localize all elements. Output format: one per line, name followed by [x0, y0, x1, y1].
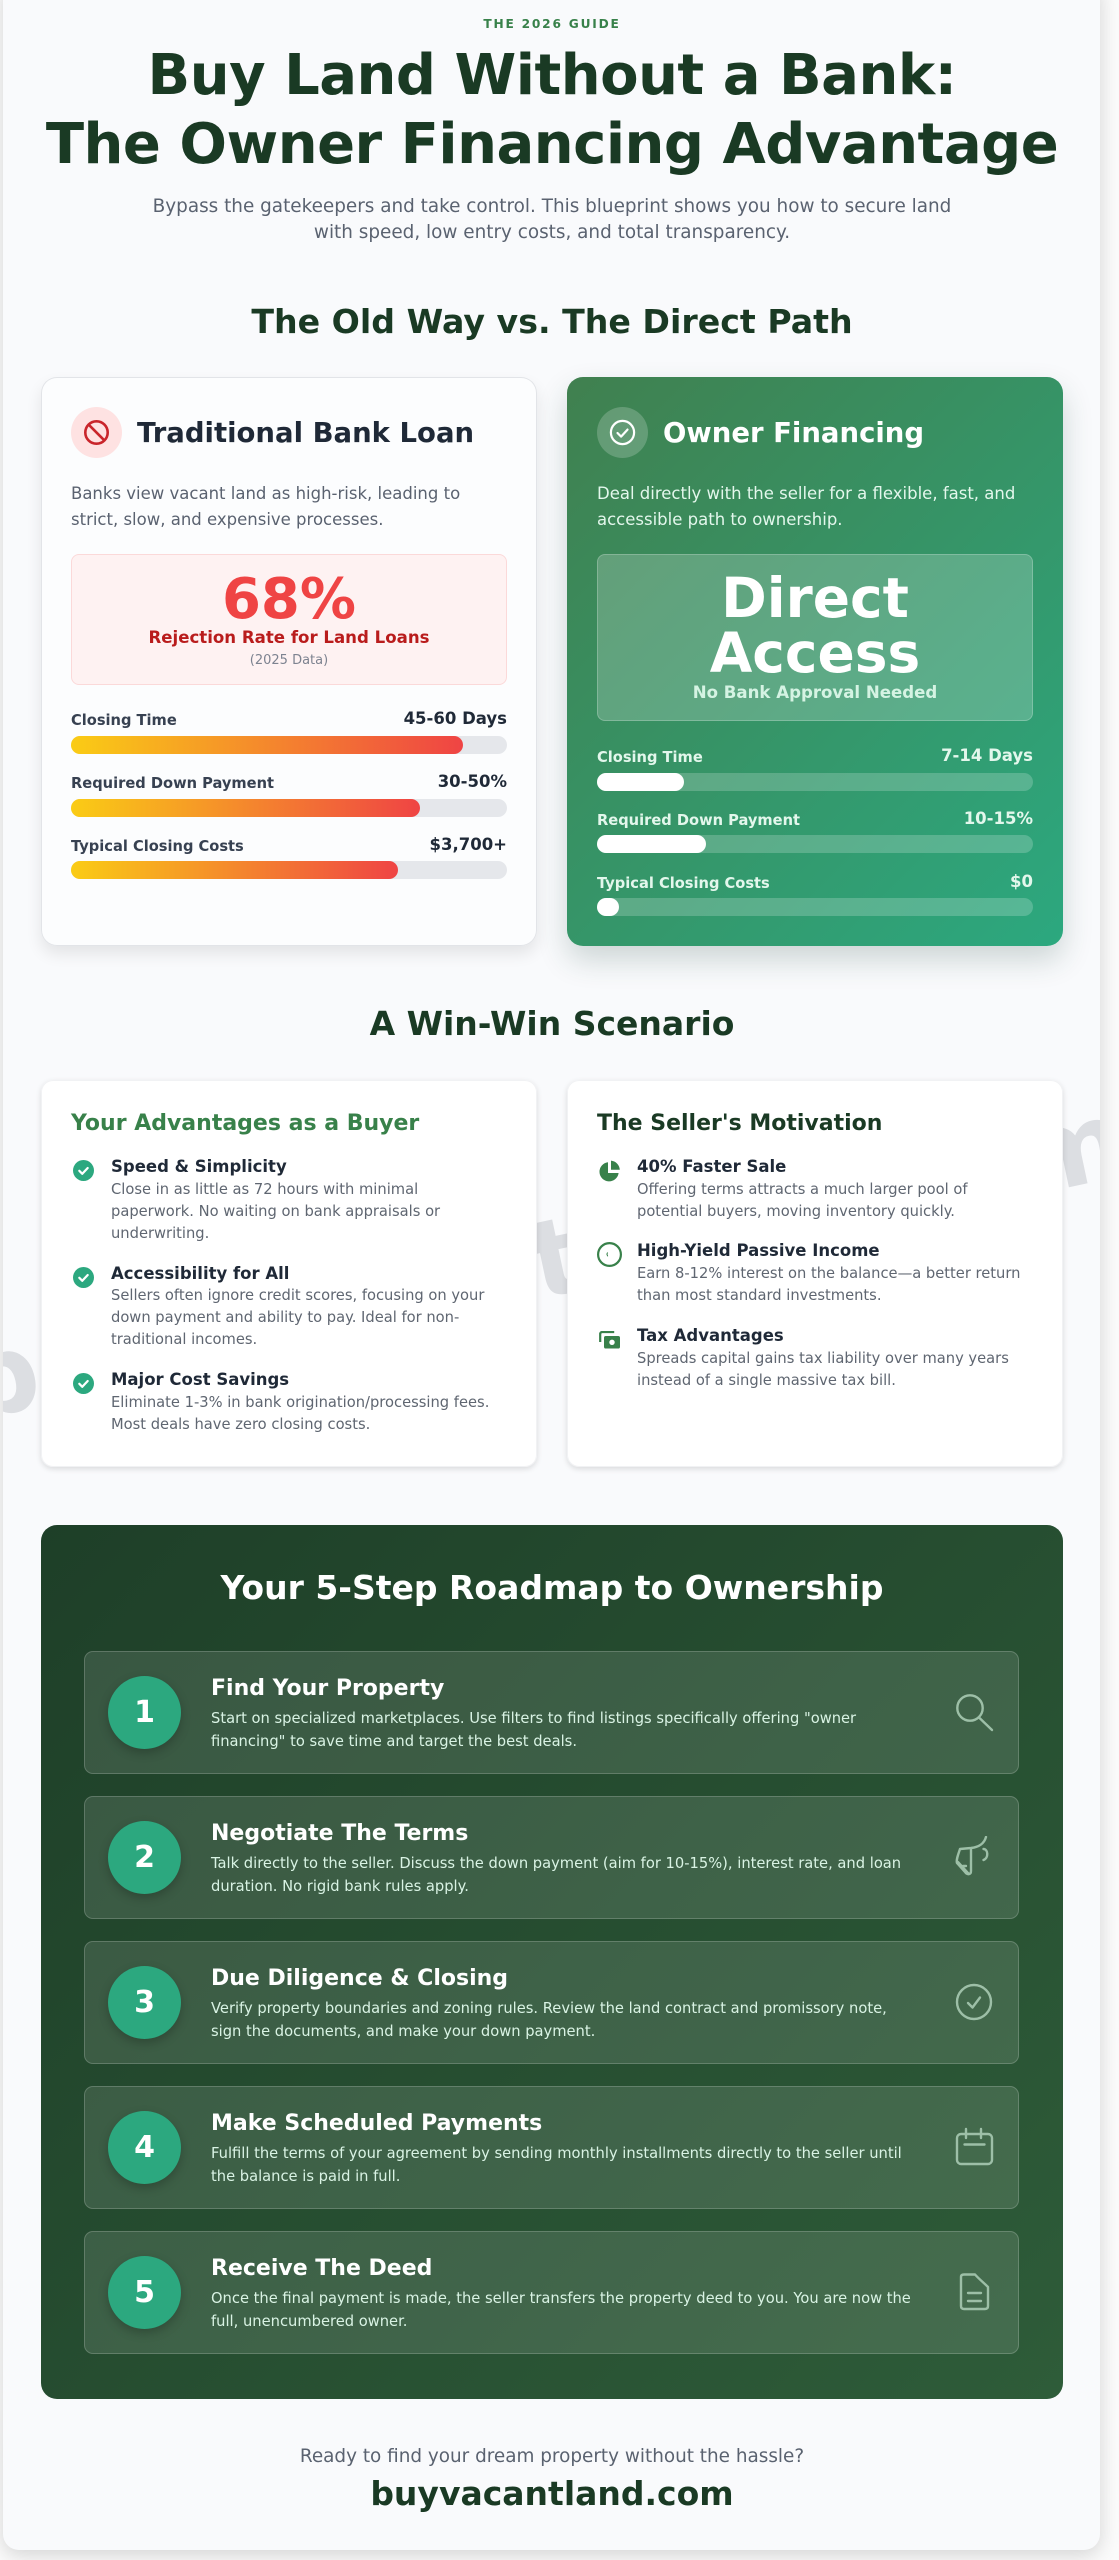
item: accessibility: Accessibility for All [111, 1264, 289, 1283]
section heading: comparison: The Old Way vs. The Direct Path [251, 302, 853, 341]
step 5: Receive The Deed [211, 2256, 432, 2281]
item: faster sale: Offering terms attracts a much larger pool of [637, 1181, 968, 1198]
subtitle [153, 196, 951, 242]
item: speed [73, 1156, 440, 1242]
bar: closing time [597, 746, 1033, 791]
bar: required down payment [597, 809, 1033, 853]
item: faster sale [600, 1156, 968, 1220]
bar: closing time [71, 709, 507, 754]
roadmap heading: Your 5-Step Roadmap to Ownership [221, 1568, 883, 1607]
step 4 [84, 2086, 1019, 2209]
step 3: Verify property boundaries and zoning rules. Review the land contract and promissory note, [211, 2000, 887, 2016]
bar: required down payment: Required Down Payment [71, 775, 274, 792]
item: cost savings [73, 1370, 489, 1433]
icon: search [956, 1694, 994, 1732]
item: accessibility: down payment and ability to pay. Ideal for non- [111, 1309, 459, 1326]
step 2: Negotiate The Terms [211, 1821, 468, 1846]
item: passive income: than most standard investments. [637, 1287, 882, 1304]
stat: 68% rejection [71, 554, 507, 685]
step 1 [84, 1651, 1019, 1774]
title: Buy Land Without a Bank: [148, 43, 956, 108]
step 2: duration. No rigid bank rules apply. [211, 1878, 469, 1894]
bar: closing costs: $3,700+ [430, 835, 507, 854]
stat: direct access [597, 554, 1033, 721]
stat: direct access: Direct [721, 566, 909, 630]
step 1: Start on specialized marketplaces. Use filters to find listings specifically offering "owner [211, 1710, 856, 1726]
footer url: buyvacantland.com [370, 2474, 734, 2513]
card description [71, 484, 460, 528]
bar: required down payment: 30-50% [438, 772, 507, 791]
item: passive income [597, 1241, 1020, 1304]
icon: calendar [956, 2128, 994, 2166]
title: The Owner Financing Advantage [46, 112, 1058, 177]
stat: 68% rejection: 68% [222, 567, 356, 632]
item: cost savings: Most deals have zero closing costs. [111, 1416, 370, 1433]
item: tax advantages: Tax Advantages [637, 1326, 784, 1345]
subtitle: with speed, low entry costs, and total transparency. [314, 222, 790, 242]
step 3: sign the documents, and make your down payment. [211, 2022, 595, 2040]
panel heading: The Seller's Motivation [597, 1111, 882, 1136]
item: speed: Close in as little as 72 hours with minimal [111, 1181, 418, 1198]
step 1: Find Your Property [211, 1676, 444, 1701]
step 4: the balance is paid in full. [211, 2168, 400, 2184]
item: speed: Speed & Simplicity [111, 1156, 287, 1176]
step 5: Once the final payment is made, the seller transfers the property deed to you. You are now the [211, 2290, 911, 2306]
item: passive income: Earn 8-12% interest on the balance—a better return [637, 1265, 1020, 1282]
bar: closing costs [597, 872, 1033, 916]
bar: closing time: 45-60 Days [404, 709, 507, 728]
icon: check circle [956, 1984, 992, 2020]
card description: accessible path to ownership. [597, 510, 843, 528]
item: speed: underwriting. [111, 1225, 209, 1242]
step 1: financing" to save time and target the best deals. [211, 1732, 577, 1750]
icon: prohibited [71, 407, 122, 458]
item: faster sale: potential buyers, moving inventory quickly. [637, 1203, 955, 1220]
item: tax advantages [599, 1326, 1009, 1389]
icon: check circle [597, 407, 648, 458]
bar: required down payment [71, 772, 507, 817]
panel: roadmap [41, 1525, 1063, 2399]
bar: required down payment: Required Down Payment [597, 812, 800, 829]
item: passive income: High-Yield Passive Income [637, 1241, 880, 1260]
subtitle: Bypass the gatekeepers and take control. This blueprint shows you how to secure land [153, 196, 951, 216]
step 1: 1 [134, 1695, 155, 1730]
stat: 68% rejection: (2025 Data) [250, 653, 328, 668]
item: speed: paperwork. No waiting on bank appraisals or [111, 1203, 440, 1220]
item: cost savings: Eliminate 1-3% in bank origination/processing fees. [111, 1394, 489, 1411]
stat: direct access: Access [710, 621, 920, 685]
step 5: 5 [134, 2275, 155, 2310]
eyebrow: THE 2026 GUIDE [483, 17, 621, 31]
bar: closing time: Closing Time [597, 749, 703, 766]
step 3: 3 [134, 1985, 155, 2020]
panel: seller motivation [567, 1080, 1063, 1467]
card heading: Traditional Bank Loan [137, 417, 474, 449]
bar: closing costs: Typical Closing Costs [597, 875, 770, 892]
item: faster sale: 40% Faster Sale [637, 1156, 786, 1176]
card description [597, 484, 1015, 528]
item: cost savings: Major Cost Savings [111, 1370, 289, 1389]
item: accessibility: traditional incomes. [111, 1331, 257, 1348]
step 2: Talk directly to the seller. Discuss the down payment (aim for 10-15%), interest rate, and loan [211, 1854, 901, 1872]
card heading: Owner Financing [663, 417, 924, 449]
bar: closing time: Closing Time [71, 712, 177, 729]
step 4: Make Scheduled Payments [211, 2111, 542, 2136]
panel: traditional bank loan [41, 377, 537, 946]
step 3: Due Diligence & Closing [211, 1966, 508, 1991]
step 5: full, unencumbered owner. [211, 2312, 407, 2330]
stat: direct access: No Bank Approval Needed [693, 683, 937, 702]
step 5 [84, 2231, 1019, 2354]
item: tax advantages: instead of a single massive tax bill. [637, 1372, 896, 1389]
bar: closing costs [71, 835, 507, 879]
panel heading: Your Advantages as a Buyer [71, 1111, 419, 1136]
title [46, 43, 1058, 177]
item: accessibility: Sellers often ignore credit scores, focusing on your [111, 1287, 484, 1304]
icon: document [960, 2273, 990, 2310]
bar: closing costs: Typical Closing Costs [71, 838, 244, 855]
step 4: 4 [134, 2130, 155, 2165]
bar: closing time: 7-14 Days [941, 746, 1033, 765]
step 3 [84, 1941, 1019, 2064]
icon: megaphone [956, 1836, 988, 1876]
panel: buyer advantages [41, 1080, 537, 1467]
step 4: Fulfill the terms of your agreement by sending monthly installments directly to the seller until [211, 2144, 902, 2162]
card description: Banks view vacant land as high-risk, leading to [71, 484, 460, 502]
panel: owner financing [567, 377, 1063, 946]
item: tax advantages: Spreads capital gains tax liability over many years [637, 1350, 1009, 1367]
stat: 68% rejection: Rejection Rate for Land Loans [148, 628, 430, 647]
card description: strict, slow, and expensive processes. [71, 510, 383, 528]
footer prompt: Ready to find your dream property without the hassle? [300, 2446, 804, 2467]
card description: Deal directly with the seller for a flexible, fast, and [597, 484, 1015, 502]
bar: closing costs: $0 [1010, 872, 1033, 891]
step 2: 2 [134, 1840, 155, 1875]
section heading: win-win: A Win-Win Scenario [370, 1004, 734, 1043]
item: accessibility [73, 1264, 484, 1348]
step 2 [84, 1796, 1019, 1919]
bar: required down payment: 10-15% [964, 809, 1033, 828]
